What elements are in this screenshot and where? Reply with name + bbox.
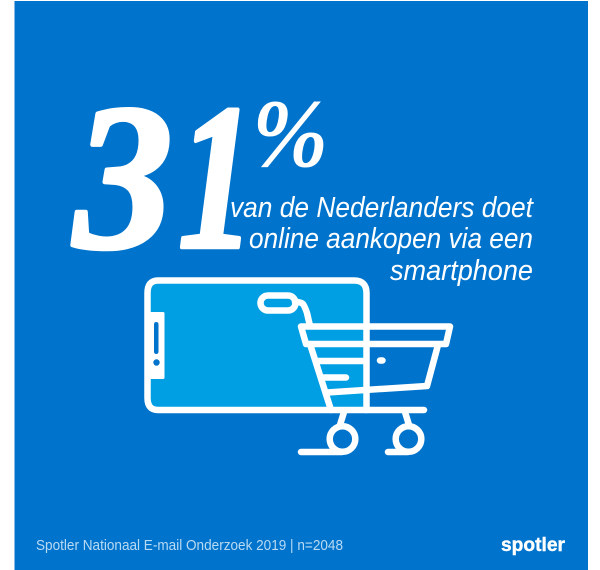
text block: description: smartphone bbox=[390, 255, 533, 287]
phone side button bbox=[148, 314, 163, 378]
icon: smartphone with shopping cart bbox=[148, 280, 450, 452]
logo: spotler: spotler bbox=[501, 534, 565, 556]
cart base bbox=[366, 407, 424, 413]
big number 31 bbox=[72, 61, 255, 292]
text block: description: online aankopen via een bbox=[249, 223, 533, 255]
cart dot bbox=[380, 357, 382, 364]
big number 31: 1 bbox=[178, 62, 255, 292]
text block: description bbox=[230, 192, 534, 287]
text block: description: van de Nederlanders doet bbox=[230, 192, 534, 224]
cart wheels bbox=[330, 426, 355, 452]
big number 31: 3 bbox=[72, 61, 173, 292]
cart handle bbox=[260, 296, 296, 310]
cart basket bbox=[301, 326, 450, 344]
phone screen fill bbox=[148, 280, 366, 410]
phone outline bbox=[148, 280, 366, 410]
source note: Spotler Nationaal E-mail Onderzoek 2019 | n=2048 bbox=[36, 538, 343, 554]
percent sign: % bbox=[252, 80, 328, 188]
